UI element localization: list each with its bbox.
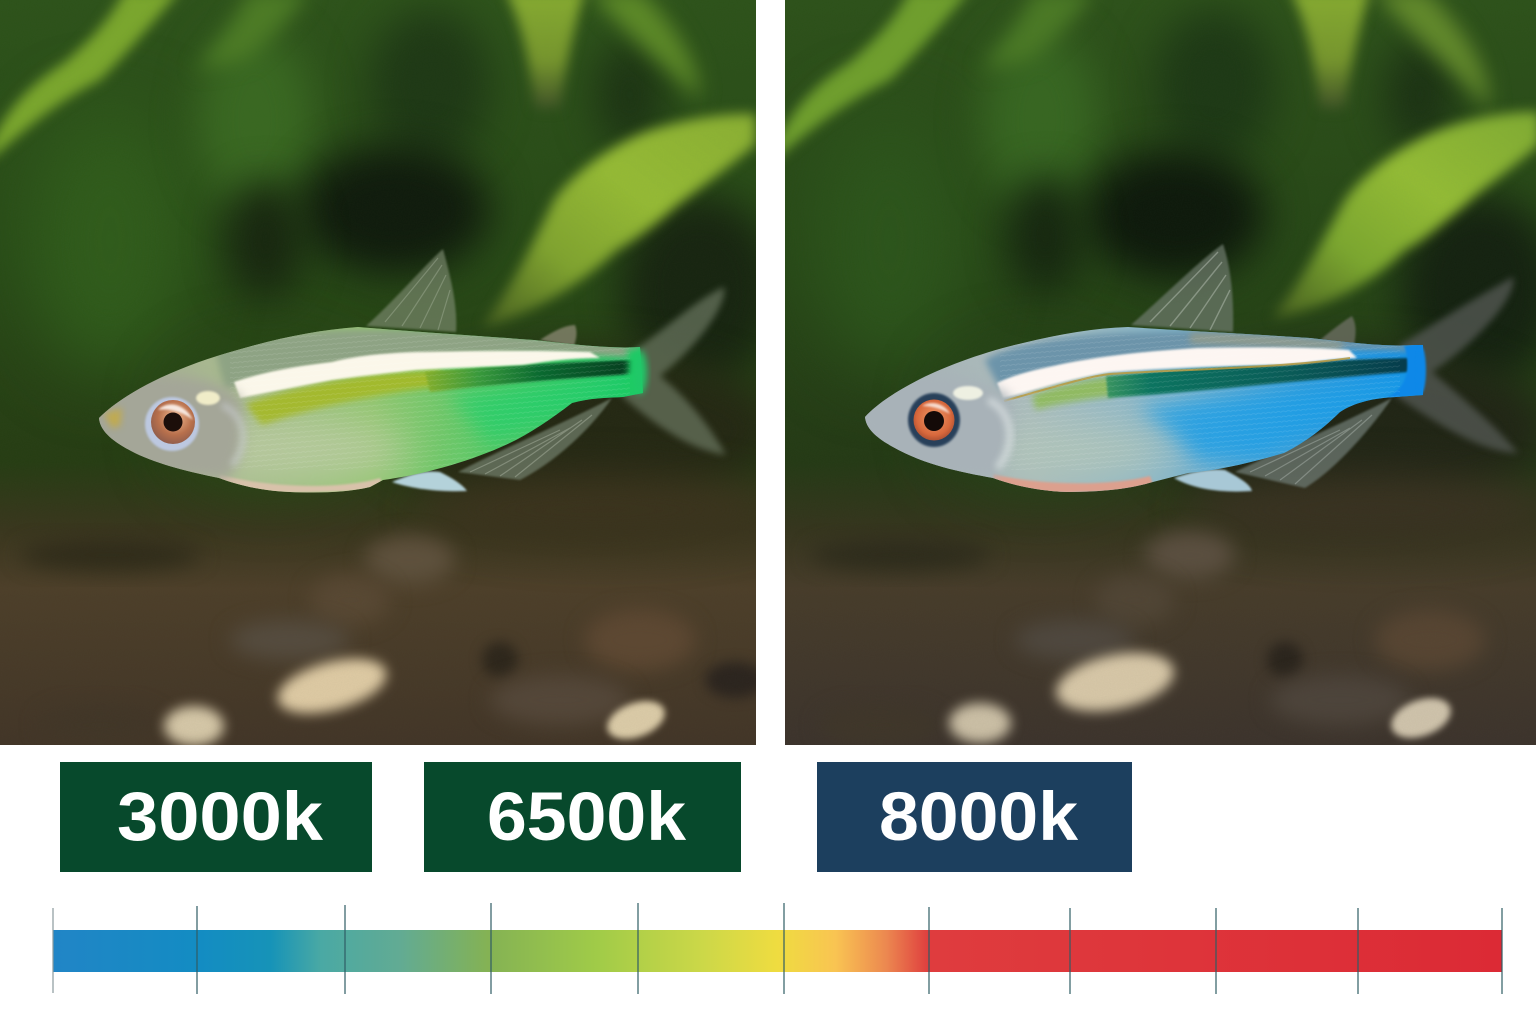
illustration: tetra fish at 8000k, blue	[860, 244, 1518, 500]
photo backdrop: blurred plants and gravel	[0, 0, 780, 746]
eye	[145, 397, 199, 451]
body	[865, 327, 1423, 492]
photo backdrop: blurred plants and gravel	[775, 0, 1536, 746]
adipose fin	[540, 325, 577, 346]
label: 8000k	[817, 762, 1132, 872]
dorsal fin	[1131, 244, 1233, 332]
label: 3000k	[60, 762, 372, 872]
panel: right photo, fish at cool light	[775, 0, 1536, 746]
label: 3000k: 3000k	[117, 778, 324, 855]
ventral fin	[1174, 469, 1252, 492]
label: 6500k: 6500k	[487, 778, 687, 855]
body	[99, 327, 643, 492]
panel: left photo, fish at warm light	[0, 0, 780, 746]
tail base glow	[1420, 344, 1428, 394]
ventral fin	[392, 471, 467, 491]
colour temperature scale bar	[53, 903, 1502, 994]
eye	[908, 393, 960, 447]
tail fin	[1396, 277, 1518, 453]
anal fin	[458, 398, 612, 480]
adipose fin	[1320, 316, 1356, 345]
tail base glow	[633, 350, 647, 394]
label: 6500k	[424, 762, 741, 872]
label: 8000k: 8000k	[879, 778, 1079, 855]
illustration: tetra fish at 3000k, green	[90, 249, 726, 500]
tail fin	[622, 287, 726, 455]
dorsal fin	[366, 249, 456, 332]
anal fin	[1235, 398, 1392, 488]
